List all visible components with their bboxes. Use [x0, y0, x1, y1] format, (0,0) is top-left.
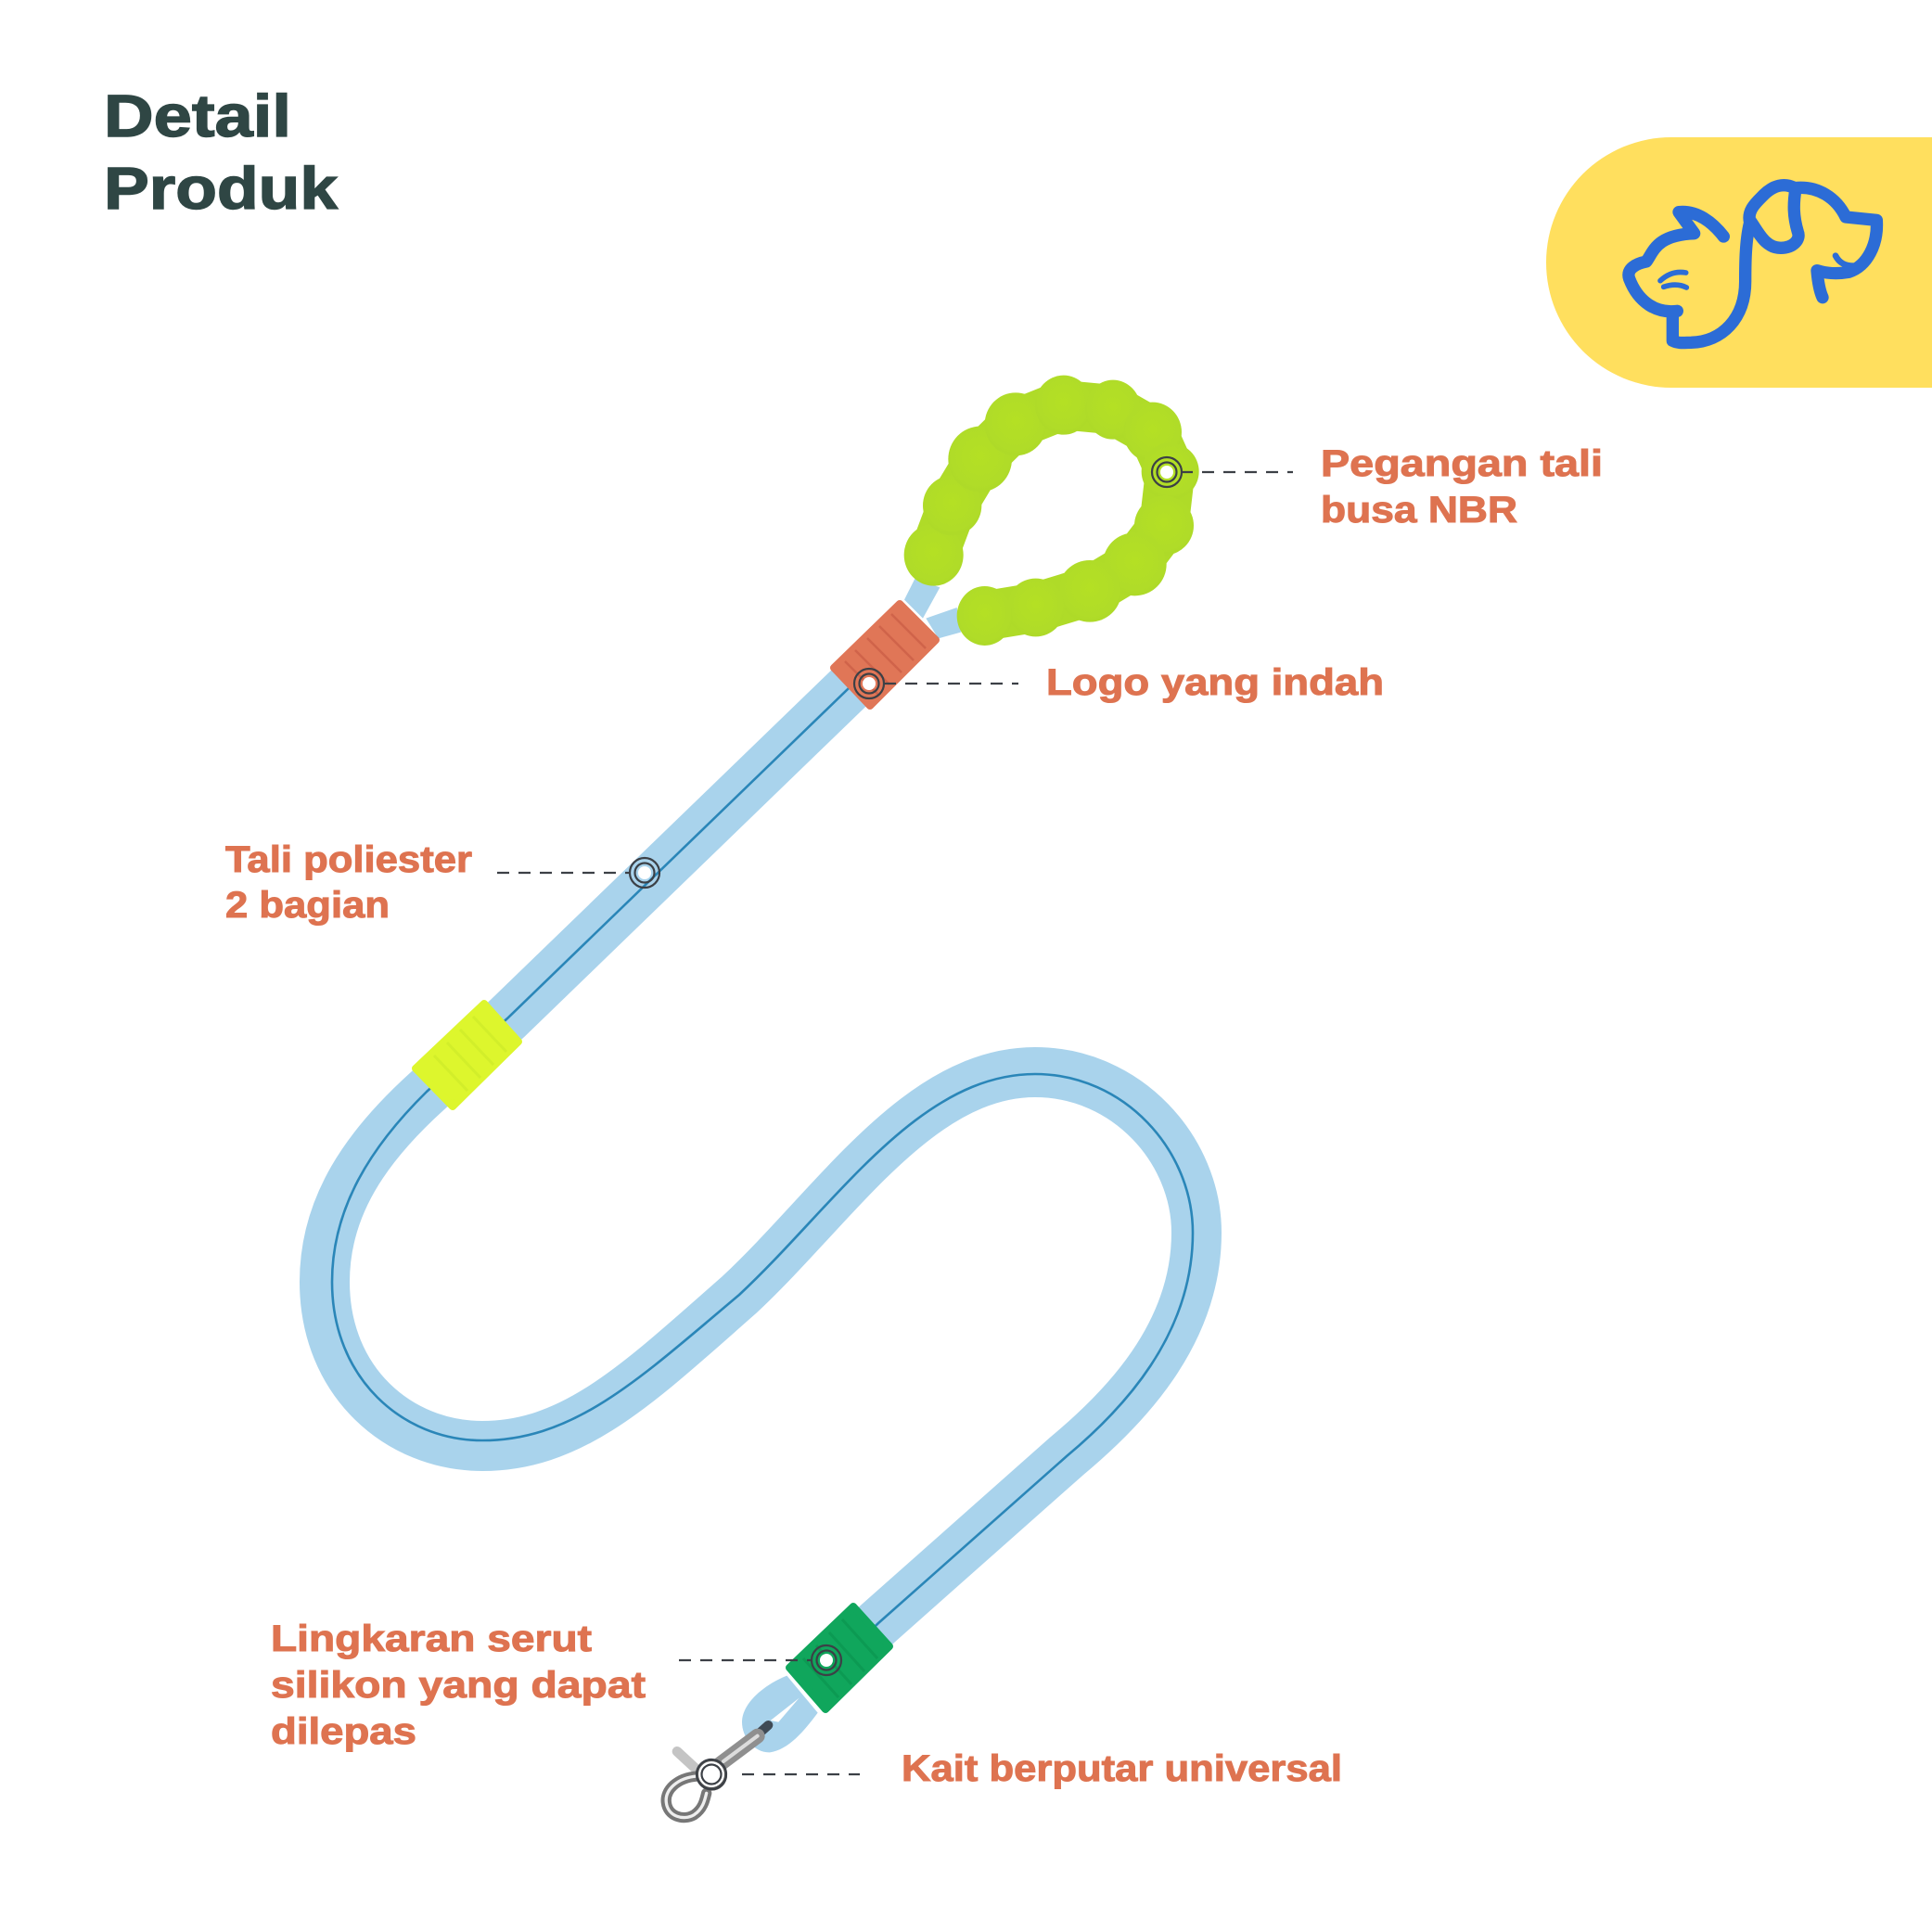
callout: Lingkaran serut silikon yang dapat dilepas	[271, 1619, 841, 1752]
leash: blue polyester rope	[325, 661, 1196, 1665]
callout: Tali poliester 2 bagian	[225, 839, 659, 926]
icon: cat and dog line logo	[1629, 186, 1876, 343]
callout: Lingkaran serut silikon yang dapat dilepas: silikon yang dapat	[271, 1665, 646, 1706]
callout: Logo yang indah	[854, 662, 1384, 703]
callout: Tali poliester 2 bagian: Tali poliester	[225, 839, 472, 880]
title	[104, 83, 338, 222]
title: Produk	[104, 155, 338, 222]
neon yellow silicone ring	[416, 1004, 518, 1107]
callout: Lingkaran serut silikon yang dapat dilepas: Lingkaran serut	[271, 1619, 592, 1659]
callout: Pegangan tali busa NBR: busa NBR	[1321, 490, 1517, 531]
handle stems: rope ends entering foam grip	[904, 578, 961, 638]
callout: Logo yang indah: Logo yang indah	[1046, 662, 1384, 703]
callout: Kait berputar universal: Kait berputar universal	[902, 1748, 1342, 1789]
brand badge: yellow tab with cat and dog logo	[1546, 137, 1932, 388]
hook-end rope loop	[742, 1676, 818, 1752]
green removable silicone ring	[789, 1606, 889, 1709]
callout: Lingkaran serut silikon yang dapat dilepas: dilepas	[271, 1711, 416, 1752]
foam handle: lime beaded NBR grip	[904, 376, 1199, 646]
swivel metal hook	[666, 1725, 768, 1818]
callout: Pegangan tali busa NBR	[1152, 443, 1603, 531]
title: Detail	[104, 83, 291, 149]
callout: Tali poliester 2 bagian: 2 bagian	[225, 885, 390, 926]
callout: Kait berputar universal	[697, 1748, 1342, 1789]
orange logo clasp	[834, 604, 936, 706]
callout: Pegangan tali busa NBR: Pegangan tali	[1321, 443, 1603, 484]
